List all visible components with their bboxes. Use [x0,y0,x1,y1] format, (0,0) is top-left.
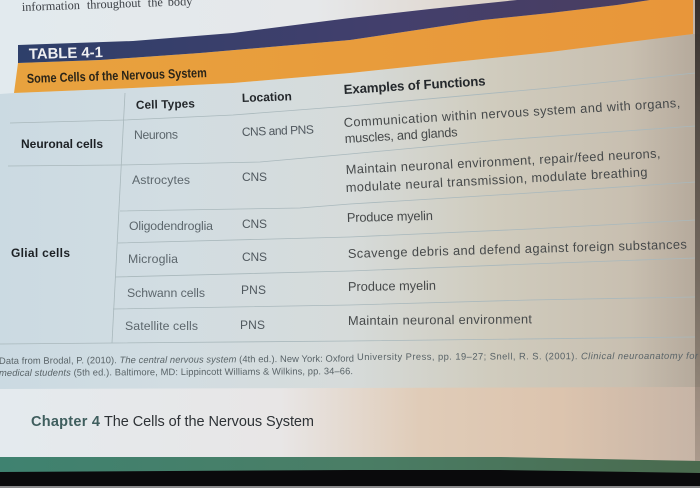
table title band [18,0,650,63]
location column: CNS [242,170,267,184]
table subtitle: Some Cells of the Nervous System [27,65,207,86]
functions column: Maintain neuronal environment [348,311,532,328]
functions column: muscles, and glands [344,124,458,146]
table rules [0,73,695,344]
functions column: Produce myelin [348,278,436,294]
table subtitle band [14,0,693,93]
right page edge shadow [695,0,700,462]
row group labels [11,137,103,260]
cell types column [125,128,213,333]
source note: Data from Brodal, P. (2010). The central nervous system (4th ed.). New York: Oxford [0,353,354,366]
functions column: Produce myelin [347,208,433,225]
column headers [136,73,486,112]
cell types column: Microglia [128,252,178,266]
functions column: Communication within nervous system and with organs, [343,95,681,130]
functions column: Scavenge debris and defend against foreign substances [348,237,687,261]
column headers: Examples of Functions [343,73,486,97]
location column: CNS [242,217,267,231]
cell types column: Astrocytes [132,173,190,187]
location column [240,122,314,332]
table number: TABLE 4-1 [29,44,103,63]
cell types column: Neurons [134,128,178,142]
functions column: modulate neural transmission, modulate breathing [345,164,648,195]
column headers: Cell Types [136,96,195,112]
table body tint [0,34,700,389]
chapter footer: Chapter 4 [31,414,100,430]
source note: medical students (5th ed.). Baltimore, MD: Lippincott Williams & Wilkins, pp. 34–66. [0,365,353,378]
column headers: Location [242,89,292,105]
functions column: Maintain neuronal environment, repair/feed neurons, [345,146,661,177]
lower page area [0,386,700,461]
cell types column: Schwann cells [127,286,205,300]
source note [0,350,699,378]
source note: University Press, pp. 19–27; Snell, R. S. (2001). Clinical neuroanatomy for [357,350,699,362]
location column: PNS [240,318,265,332]
chapter footer: The Cells of the Nervous System [104,414,314,430]
row group labels: Glial cells [11,246,70,260]
cell types column: Oligodendroglia [129,219,213,233]
functions column [343,95,687,328]
bottom edge [0,486,700,488]
location column: CNS and PNS [242,122,314,139]
green footer band [0,457,700,473]
location column: CNS [242,250,267,264]
location column: PNS [241,283,266,297]
cell types column: Satellite cells [125,319,198,333]
row group labels: Neuronal cells [21,137,103,151]
